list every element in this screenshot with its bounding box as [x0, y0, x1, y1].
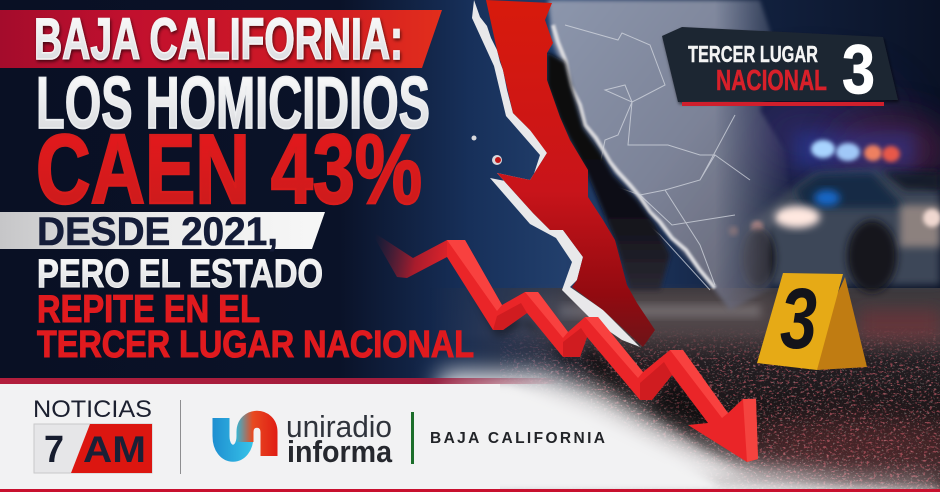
logo: Uniradio Informa [221, 409, 605, 469]
badge red rule [682, 102, 884, 106]
heading banner: red [0, 7, 442, 72]
footer divider [180, 400, 181, 474]
icon: police lights [795, 132, 915, 168]
subheading banner: white [0, 210, 325, 254]
evidence marker number 3 [757, 271, 867, 370]
logo mark [221, 418, 269, 456]
police car, blurred [728, 168, 940, 292]
logo letters: AM [83, 429, 146, 470]
light footer panel [0, 372, 940, 492]
map: Mexico mainland in grey [548, 0, 790, 310]
logo divider [411, 412, 414, 464]
subheading line 3: REPITE EN EL [37, 288, 260, 331]
badge: tercer lugar nacional [662, 27, 898, 108]
logo red slant [71, 424, 152, 473]
logo word 1: uniradio [286, 409, 392, 444]
badge line 2: NACIONAL [716, 65, 827, 97]
logo region: BAJA CALIFORNIA [430, 430, 605, 447]
logo digit: 7 [44, 429, 64, 471]
logo: Noticias 7 AM [33, 396, 152, 473]
map: Gulf of California dark water [547, 52, 670, 290]
bottom rule [0, 489, 940, 492]
logo box [34, 424, 152, 473]
accent band [0, 378, 560, 384]
map: Baja California in red [472, 0, 655, 347]
logo wordmark: NOTICIAS [33, 396, 152, 423]
subheading line 2: PERO EL ESTADO [37, 252, 323, 296]
heading line 1: BAJA CALIFORNIA: [34, 7, 403, 72]
badge line 1: TERCER LUGAR [688, 41, 818, 67]
heading line 2: LOS HOMICIDIOS [36, 63, 430, 144]
subheading line 4: TERCER LUGAR NACIONAL [37, 324, 474, 366]
marker digit: 3 [780, 271, 817, 367]
badge number: 3 [842, 30, 875, 108]
background: night scene [354, 0, 940, 489]
arrow: falling trend line [370, 230, 758, 468]
subheading line 1: DESDE 2021, [37, 210, 278, 254]
heading line 3: CAEN 43% [36, 114, 422, 224]
logo word 2: informa [287, 434, 393, 469]
